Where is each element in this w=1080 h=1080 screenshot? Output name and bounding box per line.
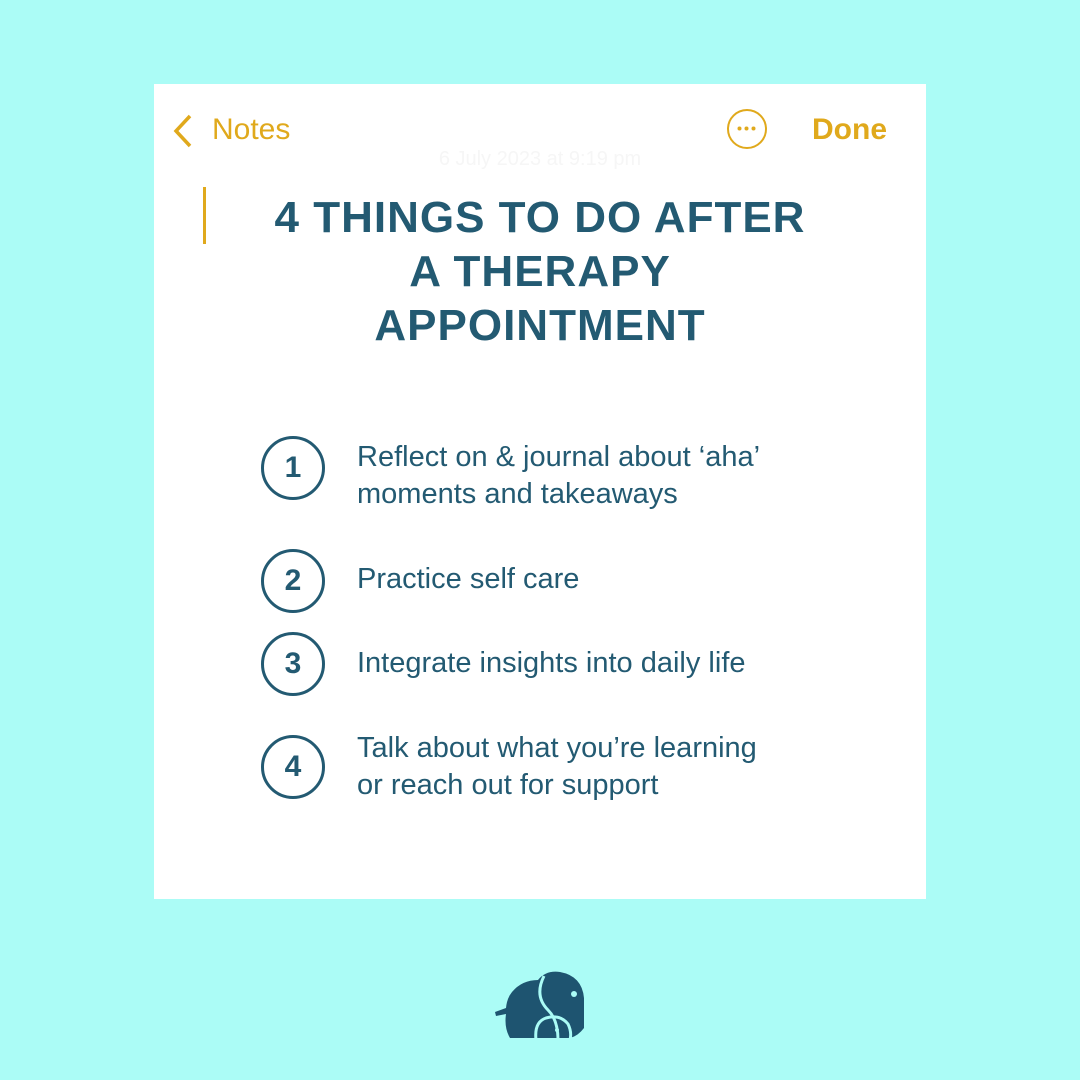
panel: notes card: 2 bbox=[285, 564, 301, 597]
panel: notes card bbox=[154, 84, 926, 899]
back button bbox=[174, 113, 290, 148]
done button: Done bbox=[812, 113, 887, 146]
panel: notes card: 4 bbox=[285, 750, 301, 783]
panel: notes card: Integrate insights into daily life bbox=[357, 647, 746, 679]
list item 1 bbox=[261, 436, 760, 510]
panel: notes card: Practice self care bbox=[357, 563, 579, 595]
title bbox=[275, 193, 805, 350]
list item 2 bbox=[261, 549, 579, 613]
title: APPOINTMENT bbox=[374, 301, 706, 350]
title: A THERAPY bbox=[409, 247, 671, 296]
panel: notes card: 3 bbox=[285, 647, 301, 680]
back button: Notes bbox=[212, 113, 290, 146]
cursor bbox=[203, 187, 206, 244]
icon: elephant logo bbox=[495, 972, 584, 1038]
panel: notes card: Talk about what you’re learning bbox=[357, 732, 757, 764]
panel: notes card: 1 bbox=[285, 451, 301, 484]
panel: notes card: moments and takeaways bbox=[357, 478, 678, 510]
panel: notes card: Reflect on & journal about ‘aha’ bbox=[357, 441, 760, 473]
date: 6 July 2023 at 9:19 pm bbox=[439, 148, 641, 170]
list item 3 bbox=[261, 632, 746, 696]
icon: more menu bbox=[727, 109, 767, 149]
title: 4 THINGS TO DO AFTER bbox=[275, 193, 805, 242]
list item 4 bbox=[261, 732, 757, 801]
panel: notes card: or reach out for support bbox=[357, 769, 658, 801]
